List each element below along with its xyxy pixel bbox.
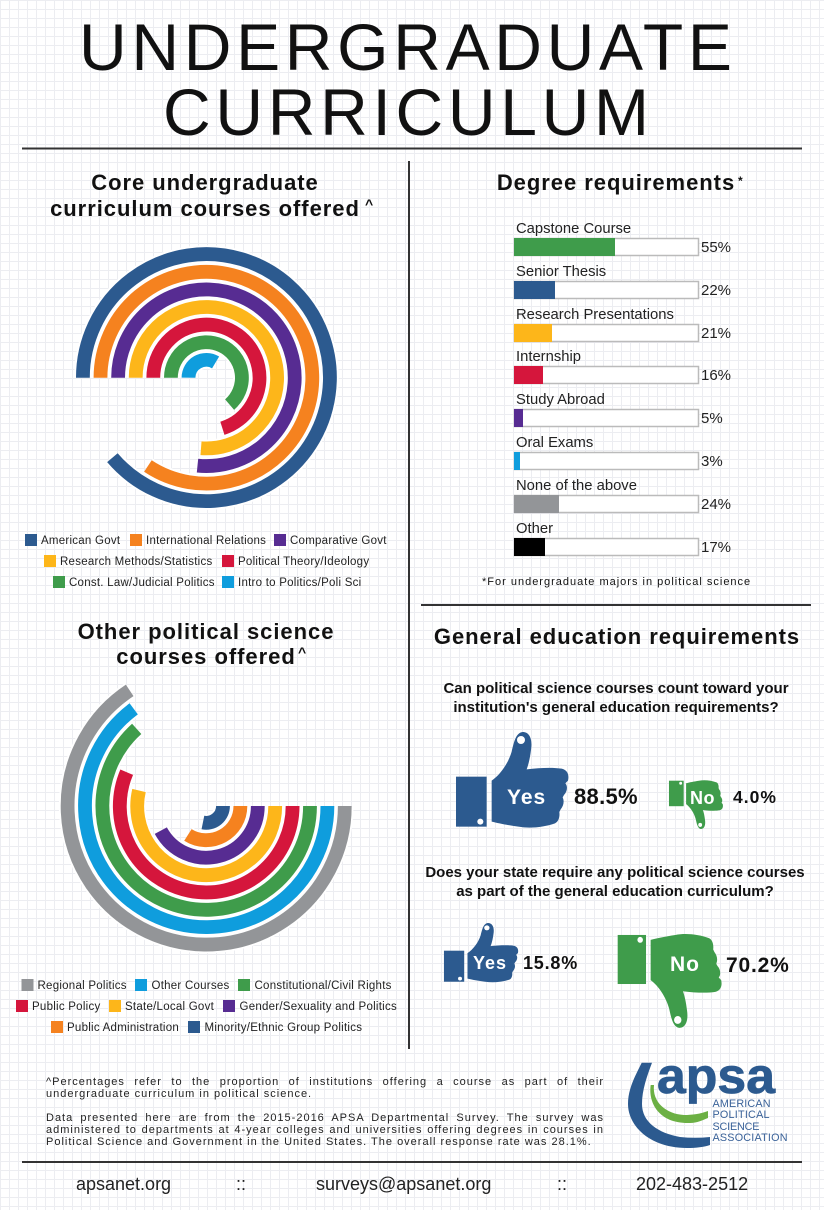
label: yes: Yes <box>507 786 546 809</box>
footnote: degree requirements: *For undergraduate majors in political science <box>482 576 751 588</box>
contact footer: surveys@apsanet.org <box>316 1174 491 1194</box>
question 2 <box>425 864 805 900</box>
heading: degree requirements: Degree requirements <box>497 170 735 195</box>
legend: other courses: Public Administration <box>67 1022 179 1034</box>
legend: other courses: Other Courses <box>152 980 230 992</box>
radial chart: core courses <box>83 254 330 501</box>
bar: study abroad: Study Abroad <box>516 392 605 408</box>
bar: other: 17% <box>701 539 731 556</box>
bar: none of the above: 24% <box>701 496 731 513</box>
bar: research presentations <box>514 307 731 342</box>
question 2: as part of the general education curriculum? <box>456 883 774 900</box>
contact footer: :: <box>236 1174 246 1194</box>
logo: APSA: apsa <box>657 1048 776 1104</box>
heading: degree requirements: * <box>738 174 743 188</box>
label: no: No <box>690 788 715 808</box>
question 2: Does your state require any political science courses <box>425 864 805 881</box>
icon: thumbs down no 4.0 <box>669 780 723 829</box>
bar: research presentations: Research Presentations <box>516 307 674 323</box>
title <box>79 10 737 149</box>
bar: study abroad: 5% <box>701 410 723 427</box>
bar: other: Other <box>516 521 553 537</box>
heading: core courses: ^ <box>365 196 373 212</box>
legend: other courses <box>16 979 397 1034</box>
note: data source: Data presented here are from the 2015-2016 APSA Departmental Survey. The survey was administered to departments at 4-year colleges and universities offering degrees in courses in Political Science and Government in the United States. The overall response rate was 28.1%. <box>46 1112 604 1148</box>
legend: other courses: Gender/Sexuality and Politics <box>240 1001 397 1013</box>
bar: senior thesis: 22% <box>701 282 731 299</box>
heading: other courses: courses offered <box>116 644 296 669</box>
legend: other courses: State/Local Govt <box>125 1001 215 1013</box>
question 1: institution's general education requirements? <box>453 699 779 716</box>
bar chart: degree requirements <box>514 221 731 556</box>
heading: other courses: Other political science <box>78 619 334 644</box>
label: yes small: Yes <box>473 953 507 973</box>
bar: oral exams: 3% <box>701 453 723 470</box>
value: 15.8%: 15.8% <box>523 953 578 973</box>
value: 70.2%: 70.2% <box>726 954 790 977</box>
value: 88.5%: 88.5% <box>574 784 638 809</box>
heading: core courses: Core undergraduate <box>91 170 319 195</box>
logo: APSA: ASSOCIATION <box>712 1132 788 1144</box>
legend: other courses: Public Policy <box>32 1001 100 1013</box>
contact footer: :: <box>557 1174 567 1194</box>
bar: capstone course: Capstone Course <box>516 221 631 237</box>
bar: internship: Internship <box>516 349 581 365</box>
bar: oral exams: Oral Exams <box>516 435 593 451</box>
bar: capstone course <box>514 221 731 256</box>
contact footer <box>76 1174 748 1194</box>
logo: APSA <box>628 1062 787 1148</box>
legend: core courses: Research Methods/Statistics <box>60 556 212 568</box>
bar: none of the above <box>514 478 731 513</box>
bar: study abroad <box>514 392 723 427</box>
legend: other courses: Regional Politics <box>38 980 127 992</box>
legend: core courses: Political Theory/Ideology <box>238 556 369 568</box>
question 1 <box>443 680 789 716</box>
bar: other <box>514 521 731 556</box>
heading: other courses: ^ <box>298 644 306 660</box>
title: CURRICULUM <box>163 75 654 149</box>
legend: core courses: International Relations <box>146 535 266 547</box>
contact footer: 202-483-2512 <box>636 1174 748 1194</box>
heading: other courses <box>78 619 334 669</box>
legend: other courses: Constitutional/Civil Rights <box>254 980 392 992</box>
legend: other courses: Minority/Ethnic Group Politics <box>204 1022 362 1034</box>
logo: APSA: SCIENCE <box>712 1121 760 1133</box>
bar: none of the above: None of the above <box>516 478 637 494</box>
bar: internship: 16% <box>701 367 731 384</box>
legend: core courses: Intro to Politics/Poli Sci <box>238 577 361 589</box>
bar: oral exams <box>514 435 723 470</box>
legend: core courses: Const. Law/Judicial Politics <box>69 577 215 589</box>
bar: senior thesis: Senior Thesis <box>516 264 606 280</box>
legend: core courses: American Govt <box>41 535 121 547</box>
radial chart: other courses <box>68 690 345 945</box>
note: percentages: ^Percentages refer to the proportion of institutions offering a course as part of their undergraduate curriculum in political science. <box>46 1076 604 1100</box>
bar: senior thesis <box>514 264 731 299</box>
heading: general education: General education requirements <box>434 624 800 649</box>
bar: internship <box>514 349 731 384</box>
icon: thumbs down no 70.2 <box>618 934 722 1028</box>
legend: core courses: Comparative Govt <box>290 535 387 547</box>
logo: APSA: POLITICAL <box>712 1109 770 1121</box>
title: UNDERGRADUATE <box>79 10 737 84</box>
logo: APSA: AMERICAN <box>712 1098 770 1110</box>
icon: thumbs up yes 88.5 <box>456 732 568 828</box>
question 1: Can political science courses count toward your <box>443 680 789 697</box>
icon: thumbs up yes 15.8 <box>444 923 518 982</box>
legend: core courses <box>25 534 387 589</box>
heading: core courses: curriculum courses offered <box>50 196 360 221</box>
heading: core courses <box>50 170 373 221</box>
label: no large: No <box>670 953 700 976</box>
bar: research presentations: 21% <box>701 325 731 342</box>
value: 4.0%: 4.0% <box>733 787 777 807</box>
bar: capstone course: 55% <box>701 239 731 256</box>
contact footer: apsanet.org <box>76 1174 171 1194</box>
